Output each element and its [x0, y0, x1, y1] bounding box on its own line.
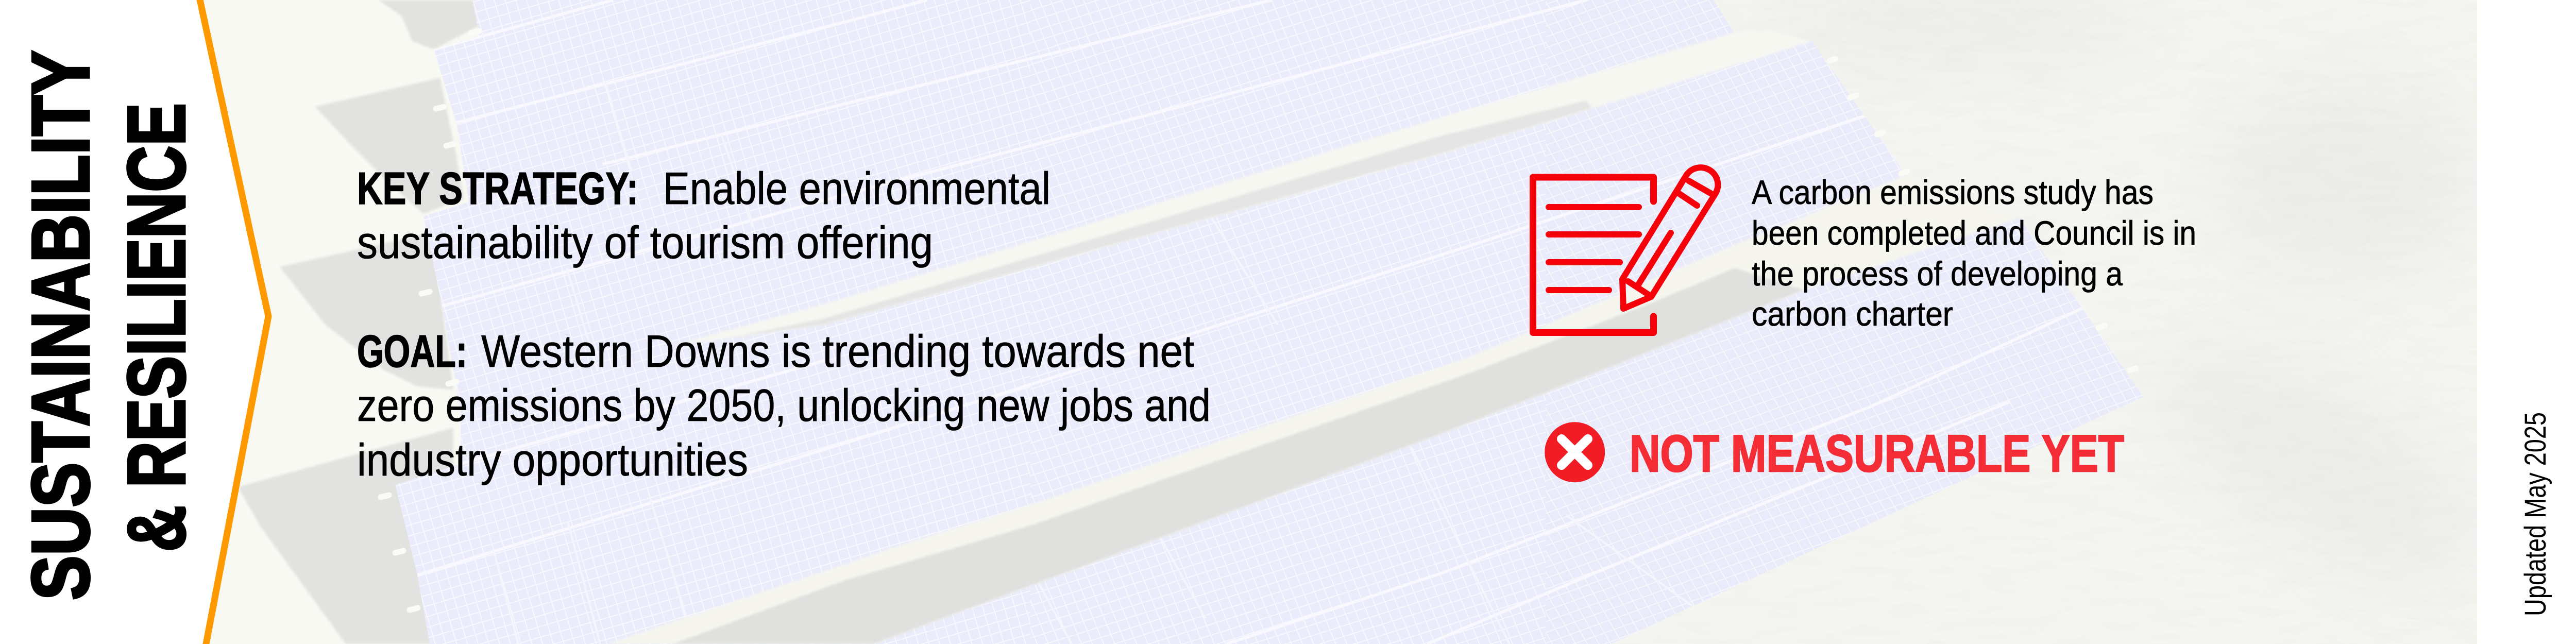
update date: Updated May 2025 — [2519, 412, 2552, 616]
icon: red cross status — [1545, 422, 1605, 482]
text block: key strategy: sustainability of tourism offering — [357, 217, 933, 268]
icon: document and pencil — [1533, 167, 1718, 333]
status label: not measurable yet: NOT MEASURABLE YET — [1630, 425, 2124, 483]
text block: carbon study note: been completed and Council is in — [1752, 214, 2196, 252]
text block: goal: Western Downs is trending towards net — [481, 326, 1194, 377]
text block: key strategy — [357, 163, 1050, 268]
sand gap between lower panel rows — [607, 175, 2020, 644]
text block: goal — [357, 326, 1211, 485]
brighter ground on the left — [196, 0, 484, 644]
ground tone variation — [1762, 0, 2519, 632]
text block: carbon study note — [1752, 173, 2196, 333]
left white chevron panel with orange edge — [0, 0, 268, 644]
ground shadows left of the panels — [238, 0, 479, 644]
streaky ground texture — [1546, 0, 2477, 644]
text block: goal: industry opportunities — [357, 434, 748, 485]
solar panel array — [361, 0, 2164, 644]
sand gap between upper panel rows — [670, 31, 1812, 346]
text block: key strategy: KEY STRATEGY: — [357, 163, 638, 214]
text block: goal: zero emissions by 2050, unlocking new jobs and — [357, 380, 1211, 431]
text block: carbon study note: the process of developing a — [1752, 255, 2123, 293]
text block: goal: GOAL: — [357, 326, 467, 377]
text block: carbon study note: carbon charter — [1752, 295, 1953, 333]
text block: key strategy: Enable environmental — [663, 163, 1050, 214]
large shadow in lower gap — [673, 268, 1804, 644]
right white margin — [2477, 0, 2576, 644]
thin shadow in upper gap — [732, 100, 1592, 337]
text block: carbon study note: A carbon emissions study has — [1752, 173, 2154, 211]
panel mounting tabs — [381, 31, 2136, 610]
title: Sustainability & Resilience — [15, 50, 202, 600]
